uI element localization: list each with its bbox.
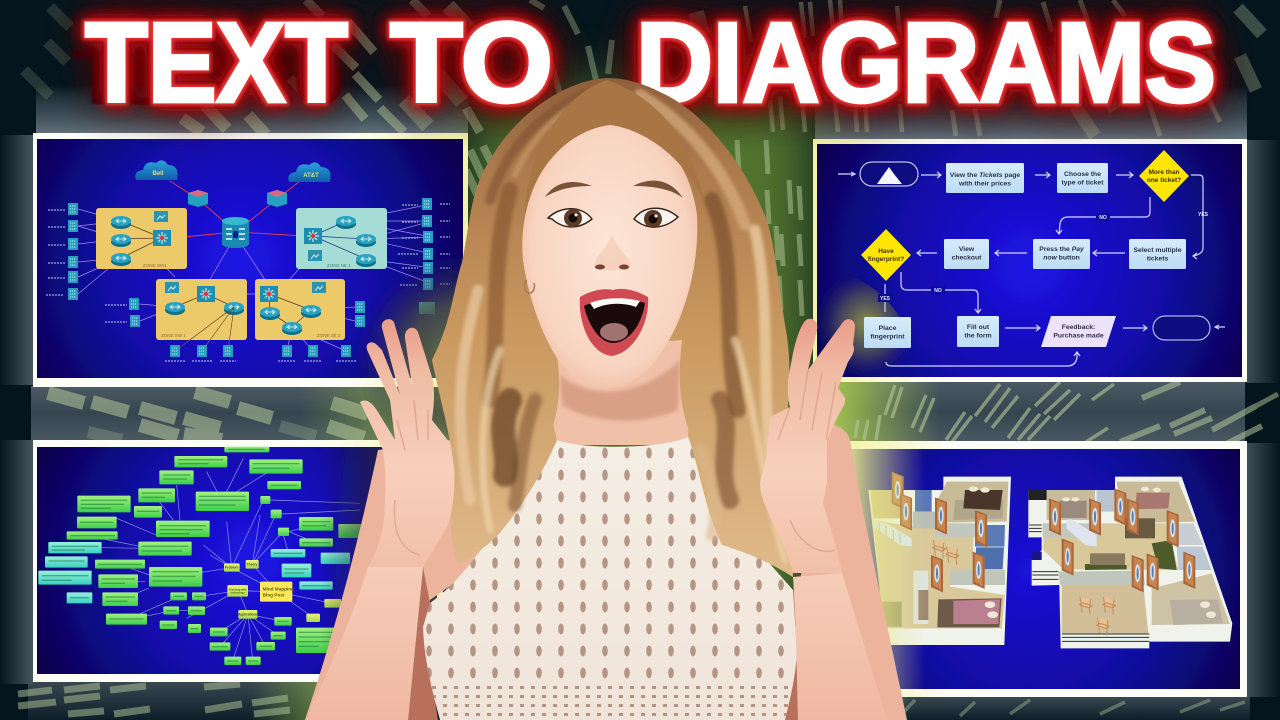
earring: [525, 280, 535, 293]
middle right thin dashes: [855, 382, 1114, 442]
label: no 2: [931, 286, 945, 294]
node: applications: Applications: [238, 613, 257, 617]
icon: Bell cloud: [135, 160, 178, 180]
box: feedback: [1041, 316, 1116, 347]
box: feedback: Feedback:: [1062, 324, 1095, 331]
panel: mind map: [33, 440, 443, 682]
box: feedback: Purchase made: [1053, 332, 1104, 340]
bottom right dashes: [880, 700, 1245, 716]
zone NE1: [296, 208, 387, 269]
ghost heading: Text to: [72, 32, 345, 121]
frame repair: network panel edge: [33, 139, 468, 387]
icon: QFP routers: [188, 190, 287, 207]
box: view tickets page: [946, 163, 1024, 193]
box: fill out form: [957, 316, 999, 347]
box: press pay: [1033, 239, 1090, 269]
box: select multiple: tickets: [1147, 256, 1168, 262]
label: yes 2: YES: [880, 296, 891, 302]
dashes either side of head: [737, 140, 802, 316]
decision: have fingerprint: Have: [878, 248, 894, 255]
floor plan: left unit: [868, 472, 1011, 645]
eyebrows: [545, 181, 683, 198]
zone NW1: ZONE NW1: [143, 263, 167, 268]
panel: floor plan: [840, 441, 1247, 697]
decision: more than one ticket: [1139, 150, 1189, 202]
bottom left dashes: [18, 684, 290, 714]
arm shadow: [408, 567, 800, 720]
label: no: [1096, 213, 1110, 221]
start pill: [860, 162, 918, 186]
right hand: [760, 319, 855, 573]
box: place fingerprint: fingerprint: [871, 334, 905, 340]
centre green: [470, 90, 815, 720]
label: no 2: NO: [934, 288, 942, 294]
nose: [594, 235, 631, 271]
panel fade near arm: [320, 447, 437, 674]
icon: core switch: [222, 217, 249, 248]
floor plan: right unit: [1028, 477, 1232, 648]
node: theory: Theory: [247, 563, 257, 567]
panel: flowchart: [813, 139, 1247, 382]
decision: more than one ticket: More than: [1148, 169, 1180, 176]
left hand finger lines: [394, 400, 428, 555]
node: problem: Problem: [225, 566, 238, 570]
node: central topic: Mind Mapping: [263, 587, 294, 592]
box: view checkout: checkout: [952, 254, 982, 262]
zone SW1: ZONE SW 1: [161, 333, 186, 338]
node: teaching: Teaching with: [229, 587, 247, 591]
top left bright dashes: [330, 22, 480, 132]
node: central topic: Blog Post: [263, 593, 285, 598]
title: TEXT: [85, 0, 348, 126]
middle left wide dashes: [48, 392, 368, 440]
panel: network diagram: [33, 133, 468, 440]
upper arms: [305, 423, 907, 720]
face: [522, 122, 697, 389]
hair parting: [525, 80, 705, 215]
node: teaching: technology: [231, 591, 245, 595]
panel fade near hand: [358, 258, 462, 440]
box: place fingerprint: Place: [879, 325, 897, 332]
decision: have fingerprint: [861, 229, 911, 281]
end pill: [1153, 316, 1210, 340]
box: view tickets page: with their prices: [958, 180, 1011, 188]
node: central topic: [260, 582, 294, 602]
icon: AT&T cloud: [288, 162, 331, 182]
neck shadow: [560, 360, 680, 421]
box: view checkout: View: [959, 246, 975, 253]
box: view checkout: [944, 239, 989, 269]
box: fill out form: the form: [964, 332, 992, 340]
panel glow near arm: [850, 449, 925, 689]
green nodes: [67, 447, 362, 665]
cyan nodes: [38, 542, 350, 603]
box: press pay: Press the Pay: [1039, 246, 1085, 253]
box: choose ticket: Choose the: [1064, 171, 1101, 178]
right forearm: [793, 573, 887, 720]
box: choose ticket: type of ticket: [1062, 180, 1104, 186]
box: choose ticket: [1057, 163, 1108, 193]
title: TO: [390, 0, 553, 126]
crochet top: [420, 436, 800, 720]
network devices: [46, 198, 450, 361]
left forearm: [305, 567, 423, 720]
label: yes 2: [878, 294, 892, 302]
back hair: [432, 78, 793, 577]
eyes: [548, 208, 678, 228]
box: place fingerprint: [864, 317, 911, 348]
icon: Bell cloud: Bell: [152, 171, 164, 177]
box: view tickets page: View the Tickets page: [950, 172, 1020, 179]
panel fade near hand: [817, 270, 917, 377]
right hand finger lines: [778, 370, 836, 551]
neck: [545, 340, 695, 445]
box: select multiple: Select multiple: [1134, 247, 1182, 254]
zone SE2: [255, 279, 345, 340]
zone SW1: [156, 279, 247, 351]
front hair over top: [440, 290, 793, 577]
title: [85, 0, 1216, 126]
zone NW1: [96, 208, 187, 269]
left hand: [360, 319, 454, 567]
person: [305, 78, 907, 720]
box: fill out form: Fill out: [967, 324, 990, 331]
yellow-green nodes: [224, 560, 341, 622]
hair shading: [460, 88, 785, 560]
label: yes: YES: [1198, 212, 1209, 218]
decision: have fingerprint: fingerprint?: [868, 256, 904, 263]
decision: more than one ticket: one ticket?: [1147, 177, 1181, 184]
icon: AT&T cloud: AT&T: [303, 173, 319, 179]
box: press pay: now button: [1043, 254, 1080, 262]
label: no: NO: [1099, 215, 1107, 221]
zone NE1: ZONE NE 1: [327, 263, 351, 268]
node text bars: [42, 449, 333, 662]
title: DIAGRAMS: [636, 0, 1216, 126]
top left dim dashes: [24, 7, 70, 96]
zone SE2: ZONE SE 2: [317, 333, 341, 338]
mouth: [580, 289, 648, 356]
top right thin vertical dashes: [696, 12, 706, 48]
arrows: [838, 172, 1225, 366]
box: select multiple: [1129, 239, 1186, 269]
